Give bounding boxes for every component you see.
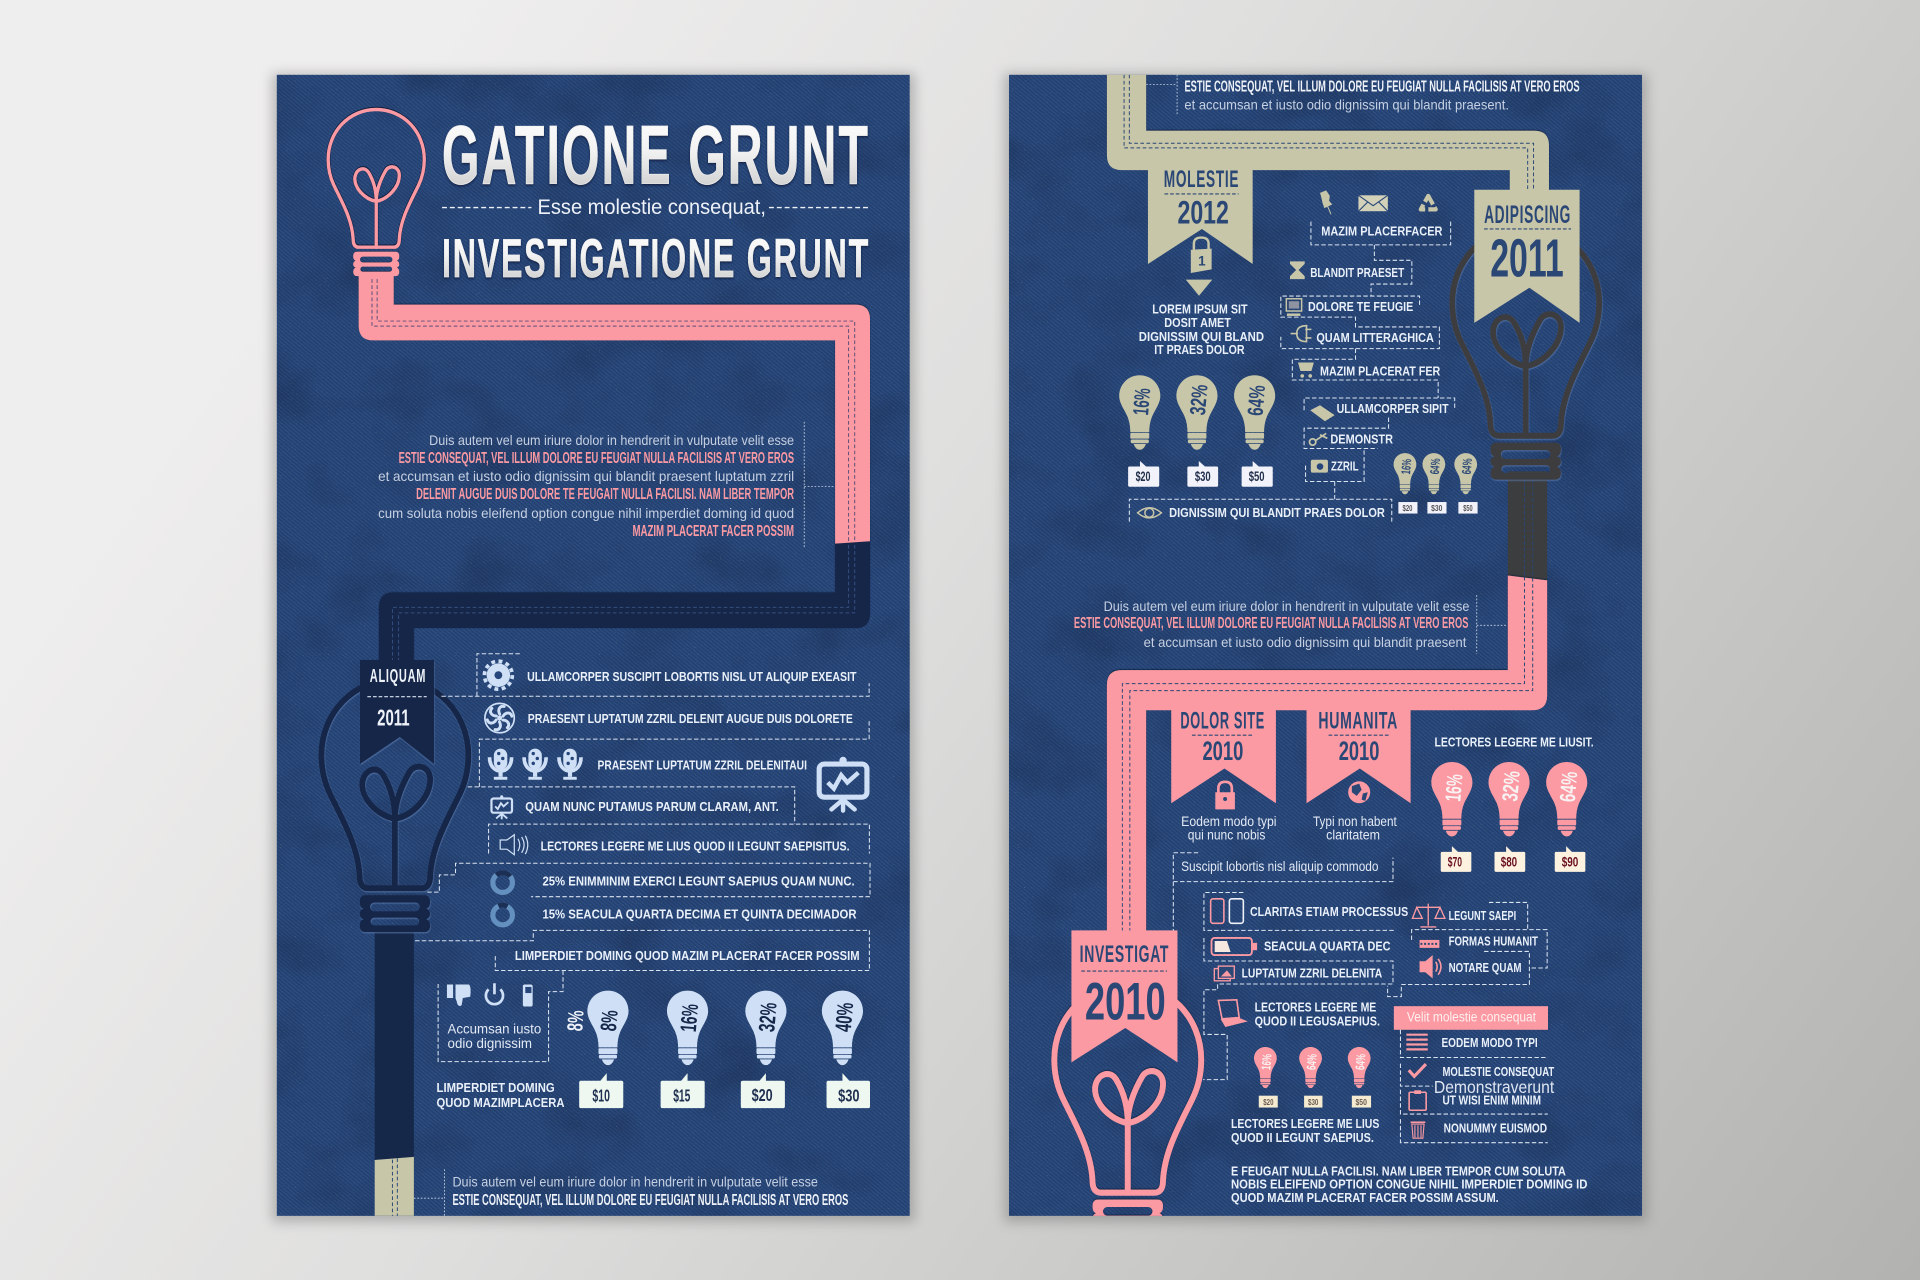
- price tag: small 20: $20: [1403, 503, 1413, 513]
- pipe: pink section: [359, 276, 870, 544]
- chart: bulb 16 percent: 16%: [675, 1003, 703, 1033]
- label: row 7: 15% SEACULA QUARTA DECIMA ET QUINTA DECIMADOR: [542, 906, 857, 921]
- icon: eye: [1138, 508, 1161, 518]
- icon: trash: [1411, 1122, 1425, 1138]
- banner: dolor site 2010: 2010: [1202, 736, 1243, 766]
- text block: footer paragraph: ESTIE CONSEQUAT, VEL ILLUM DOLORE EU FEUGIAT NULLA FACILISIS AT VERO EROS: [452, 1192, 848, 1209]
- banner: adipiscing 2011: ADIPISCING: [1484, 201, 1571, 229]
- icon: check: [1409, 1064, 1426, 1076]
- price tag: small 50: [1458, 502, 1478, 514]
- chart: pink bulb 16 percent: 16%: [1440, 773, 1468, 802]
- label: mazim placerfacer: MAZIM PLACERFACER: [1321, 223, 1443, 238]
- label: row 2: PRAESENT LUPTATUM ZZRIL DELENIT AUGUE DUIS DOLORETE: [528, 711, 853, 726]
- price tag: 70: $70: [1448, 854, 1462, 869]
- label: row 8: LIMPERDIET DOMING QUOD MAZIM PLACERAT FACER POSSIM: [515, 948, 860, 963]
- icon: fan: [485, 703, 514, 733]
- text block: limperdiet: QUOD MAZIMPLACERA: [437, 1095, 565, 1110]
- price tag: 30: [827, 1073, 870, 1108]
- price tag: small 30: [1427, 502, 1446, 514]
- chart: bulb 8 percent: 8%: [595, 1009, 623, 1032]
- chart: small pink bulb 64 percent second: 64%: [1352, 1053, 1368, 1070]
- panel: right poster: [1009, 67, 1642, 1237]
- text block: top text: et accumsan et iusto odio dignissim qui blandit praesent.: [1184, 96, 1509, 112]
- list header: velit molestie: Velit molestie consequat: [1407, 1009, 1536, 1024]
- panel: left poster: [277, 75, 910, 1216]
- text block: intro paragraph: ESTIE CONSEQUAT, VEL ILLUM DOLORE EU FEUGIAT NULLA FACILISIS AT VERO EROS: [399, 450, 794, 467]
- banner: dolor site 2010: DOLOR SITE: [1180, 708, 1265, 735]
- icon: pin: [1320, 190, 1332, 214]
- icon: hourglass: [1290, 261, 1305, 279]
- icon: padlock pink: [1215, 782, 1235, 809]
- text block: limperdiet: [437, 1080, 565, 1110]
- banner: aliquam 2011: ALIQUAM: [370, 665, 426, 686]
- label: row 1: ULLAMCORPER SUSCIPIT LOBORTIS NISL UT ALIQUIP EXEASIT: [527, 669, 857, 684]
- banner: humanita 2010: [1307, 708, 1411, 803]
- icon: phones: [1211, 899, 1243, 923]
- chart: pink bulb 16 percent: [1431, 762, 1472, 836]
- banner: humanita 2010: HUMANITA: [1318, 708, 1398, 735]
- price tag: small 50: $50: [1463, 503, 1473, 513]
- text block: lectores lius: [1231, 1116, 1380, 1145]
- banner: investigat 2010: INVESTIGAT: [1080, 941, 1169, 968]
- price tag: 80: [1494, 846, 1525, 872]
- icon: gear: [484, 661, 512, 689]
- banner: investigat 2010: 2010: [1085, 973, 1166, 1032]
- label: legunt saepi: LEGUNT SAEPI: [1449, 908, 1516, 923]
- price tag: small pink 20: $20: [1263, 1097, 1274, 1107]
- text block: typi non habent: [1313, 814, 1397, 843]
- label: row 5: LECTORES LEGERE ME LIUS QUOD II LEGUNT SAEPISITUS.: [541, 838, 850, 853]
- icon: globe: [1348, 781, 1370, 803]
- price tag: 10: [579, 1073, 623, 1108]
- chart: bulb 8 percent: [587, 991, 629, 1065]
- text block: typi non habent: claritatem: [1326, 828, 1380, 843]
- text block: limperdiet: LIMPERDIET DOMING: [437, 1080, 555, 1095]
- icon: padlock khaki: [1191, 238, 1212, 273]
- label: claritas: CLARITAS ETIAM PROCESSUS: [1250, 904, 1408, 919]
- chart: bulb 16 percent: [667, 991, 708, 1065]
- price tag: small 20: [1398, 502, 1417, 514]
- chart: small khaki bulb 16 percent: [1394, 453, 1416, 494]
- text block: lorem ipsum: LOREM IPSUM SIT: [1152, 301, 1248, 316]
- text block: accumsan: [448, 1021, 541, 1051]
- text block: lectores quod: QUOD II LEGUSAEPIUS.: [1255, 1013, 1380, 1028]
- chart: khaki bulb 32 percent: [1176, 375, 1218, 450]
- label: quam litteraghica: QUAM LITTERAGHICA: [1316, 330, 1434, 345]
- price tag: 30: $30: [1195, 469, 1211, 484]
- price tag: 20: $20: [1136, 469, 1151, 484]
- label: seacula: SEACULA QUARTA DEC: [1264, 939, 1391, 954]
- text block: lectores quod: LECTORES LEGERE ME: [1255, 999, 1377, 1014]
- icon: ring 25 percent: [489, 869, 516, 896]
- text block: footer paragraph: [452, 1174, 848, 1209]
- label: formas humanit: FORMAS HUMANIT: [1449, 933, 1538, 948]
- text block: middle paragraph: Duis autem vel eum iriure dolor in hendrerit in vulputate velit esse: [1104, 598, 1470, 614]
- banner: molestie 2012: 2012: [1177, 195, 1229, 231]
- subtitle: Esse molestie consequat,: [538, 195, 766, 219]
- chart: small khaki bulb 64 percent second: 64%: [1459, 457, 1475, 475]
- price tag: 20: $20: [752, 1085, 773, 1105]
- pipe: pink section: [1107, 576, 1547, 937]
- text block: closing paragraph: E FEUGAIT NULLA FACILISI. NAM LIBER TEMPOR CUM SOLUTA: [1231, 1163, 1566, 1178]
- chart: pink bulb 64 percent: [1546, 762, 1587, 836]
- price tag: small pink 30: $30: [1308, 1097, 1319, 1107]
- text block: typi non habent: Typi non habent: [1313, 814, 1397, 829]
- text block: middle paragraph: [1074, 598, 1470, 650]
- icon: plug: [1291, 326, 1311, 342]
- label: demonstr: DEMONSTR: [1330, 432, 1394, 447]
- chart: small pink bulb 64 percent: 64%: [1303, 1053, 1320, 1070]
- label: rotated 8 percent: 8%: [562, 1009, 589, 1032]
- label: demonstraverunt: Demonstraverunt: [1434, 1077, 1554, 1097]
- stem: navy below bulb: [375, 931, 414, 1160]
- icon: small presentation board: [491, 795, 512, 818]
- label: notare quam: NOTARE QUAM: [1449, 960, 1522, 975]
- icon: pink title bulb: [328, 109, 424, 276]
- text block: top text: [1184, 78, 1580, 112]
- icon: navy bulb: [321, 680, 468, 932]
- chart: khaki bulb 32 percent: 32%: [1185, 383, 1213, 416]
- price tag: small pink 50: $50: [1356, 1097, 1367, 1107]
- text block: lectores lius: QUOD II LEGUNT SAEPIUS.: [1231, 1130, 1374, 1145]
- banner: aliquam 2011: [360, 660, 434, 764]
- chart: small pink bulb 16 percent: [1254, 1047, 1277, 1088]
- icon: monitor: [1286, 299, 1302, 316]
- banner: molestie 2012: [1148, 166, 1253, 264]
- icon: recycle: [1421, 196, 1436, 209]
- label: molestie consequat: MOLESTIE CONSEQUAT: [1442, 1064, 1554, 1079]
- label: row 4: QUAM NUNC PUTAMUS PARUM CLARAM, ANT.: [525, 799, 779, 814]
- icon: phone: [523, 984, 533, 1007]
- banner: dolor site 2010: [1171, 708, 1276, 803]
- label: nonummy: NONUMMY EUISMOD: [1444, 1121, 1547, 1136]
- chart: small khaki bulb 64 percent: [1422, 453, 1445, 494]
- price tag: 80: $80: [1501, 854, 1517, 869]
- label: dignissim: DIGNISSIM QUI BLANDIT PRAES DOLOR: [1169, 505, 1385, 520]
- icon: ring 15 percent: [490, 902, 516, 928]
- banner: investigat 2010: [1071, 930, 1177, 1062]
- text block: eodem modo: [1181, 814, 1277, 843]
- icon: calculator: [1310, 405, 1335, 421]
- price tag: 30: $30: [838, 1085, 860, 1105]
- price tag: 90: [1555, 846, 1585, 872]
- price tag: 15: $15: [673, 1085, 690, 1105]
- text block: accumsan: Accumsan iusto: [448, 1021, 541, 1036]
- text block: top text: ESTIE CONSEQUAT, VEL ILLUM DOLORE EU FEUGIAT NULLA FACILISIS AT VERO EROS: [1184, 78, 1580, 95]
- chart: bulb 32 percent: [745, 991, 786, 1065]
- list header: velit molestie: [1394, 1006, 1548, 1030]
- chart: pink bulb 32 percent: [1488, 762, 1530, 836]
- icon: cart: [1298, 362, 1314, 378]
- banner: molestie 2012: MOLESTIE: [1164, 166, 1239, 193]
- text block: footer paragraph: Duis autem vel eum iriure dolor in hendrerit in vulputate velit esse: [452, 1174, 818, 1190]
- text block: intro paragraph: [378, 432, 794, 540]
- banner: aliquam 2011: 2011: [377, 705, 410, 731]
- text block: lorem ipsum: DOSIT AMET: [1164, 315, 1231, 330]
- text block: lorem ipsum: IT PRAES DOLOR: [1154, 342, 1245, 357]
- label: suscipit: Suscipit lobortis nisl aliquip commodo: [1181, 859, 1379, 874]
- price tag: small pink 50: [1352, 1096, 1371, 1108]
- icon: power: [486, 983, 503, 1004]
- price tag: 90: $90: [1562, 854, 1578, 869]
- icon: envelope: [1358, 195, 1388, 211]
- text block: lorem ipsum: [1139, 301, 1264, 357]
- text block: accumsan: odio dignissim: [448, 1036, 532, 1051]
- icon: pink bottom bulb: [1054, 984, 1201, 1237]
- icon: thumbs down: [447, 984, 471, 1006]
- icon: images: [1214, 966, 1234, 981]
- chart: small pink bulb 16 percent: 16%: [1258, 1053, 1275, 1070]
- icon: camera: [1311, 460, 1328, 473]
- icon: film strip: [1420, 940, 1439, 948]
- text block: lorem ipsum: DIGNISSIM QUI BLAND: [1139, 329, 1264, 344]
- text block: closing paragraph: [1231, 1163, 1587, 1205]
- price tag: 20: [741, 1073, 785, 1108]
- price tag: 15: [661, 1073, 705, 1108]
- title: main heading: GATIONE GRUNT: [442, 109, 870, 202]
- text block: middle paragraph: et accumsan et iusto odio dignissim qui blandit praesent: [1144, 634, 1466, 650]
- label: luptatum: LUPTATUM ZZRIL DELENITA: [1242, 966, 1383, 981]
- chart: small pink bulb 64 percent: [1299, 1047, 1322, 1088]
- price tag: 20: [1128, 461, 1159, 487]
- price tag: small 30: $30: [1431, 503, 1443, 513]
- stem: khaki end: [375, 1157, 414, 1216]
- chart: khaki bulb 64 percent: [1234, 375, 1275, 450]
- pipe: khaki section: [1107, 67, 1549, 196]
- text block: intro paragraph: MAZIM PLACERAT FACER POSSIM: [632, 523, 794, 540]
- chart: small khaki bulb 64 percent: 64%: [1427, 457, 1443, 475]
- icon: clipboard: [1409, 1090, 1426, 1110]
- label: eodem modo typi: EODEM MODO TYPI: [1441, 1035, 1538, 1050]
- icon: list lines: [1406, 1035, 1428, 1049]
- label: dolore te feugie: DOLORE TE FEUGIE: [1308, 299, 1414, 314]
- text block: lectores quod: [1255, 999, 1380, 1028]
- text block: eodem modo: qui nunc nobis: [1188, 828, 1266, 843]
- text block: closing paragraph: NOBIS ELEIFEND OPTION CONGUE NIHIL IMPERDIET DOMING ID: [1231, 1177, 1587, 1192]
- icons: microphones: [490, 749, 581, 778]
- icon: presentation board: [819, 757, 867, 811]
- chart: small khaki bulb 16 percent: 16%: [1398, 458, 1414, 475]
- title: second heading: INVESTIGATIONE GRUNT: [442, 227, 870, 289]
- icon: padlock khaki: 1: [1198, 254, 1206, 269]
- label: row 3: PRAESENT LUPTATUM ZZRIL DELENITAUI: [598, 758, 807, 773]
- price tag: 50: $50: [1249, 469, 1265, 484]
- banner: adipiscing 2011: [1474, 190, 1580, 323]
- chart: small khaki bulb 64 percent second: [1454, 453, 1477, 494]
- label: ut wisi: UT WISI ENIM MINIM: [1442, 1092, 1541, 1107]
- banner: adipiscing 2011: 2011: [1490, 228, 1564, 288]
- chart: khaki bulb 16 percent: [1119, 375, 1160, 450]
- label: lectores liusit: LECTORES LEGERE ME LIUSIT.: [1434, 735, 1594, 750]
- chart: pink bulb 32 percent: 32%: [1497, 770, 1525, 802]
- label: row 6: 25% ENIMMINIM EXERCI LEGUNT SAEPIUS QUAM NUNC.: [542, 873, 855, 888]
- label: mazim placerat fer: MAZIM PLACERAT FER: [1320, 363, 1441, 378]
- icon: dark bulb: [1452, 227, 1599, 480]
- arrow: down triangle: [1186, 280, 1212, 296]
- chart: khaki bulb 64 percent: 64%: [1243, 384, 1270, 417]
- price tag: 70: [1441, 846, 1471, 872]
- chart: bulb 32 percent: 32%: [753, 1001, 782, 1033]
- chart: bulb 40 percent: 40%: [830, 1001, 858, 1033]
- text block: intro paragraph: DELENIT AUGUE DUIS DOLORE TE FEUGAIT NULLA FACILISI. NAM LIBER TEMPOR: [416, 486, 794, 503]
- text block: lectores lius: LECTORES LEGERE ME LIUS: [1231, 1116, 1380, 1131]
- chart: pink bulb 64 percent: 64%: [1555, 770, 1582, 803]
- stem: dark section: [1508, 471, 1547, 580]
- icon: laptop: [1218, 1000, 1245, 1026]
- text block: intro paragraph: Duis autem vel eum iriure dolor in hendrerit in vulputate velit esse: [429, 432, 794, 448]
- price tag: 30: [1187, 461, 1218, 487]
- chart: small pink bulb 64 percent second: [1348, 1047, 1371, 1088]
- label: blandit praeset: BLANDIT PRAESET: [1310, 265, 1404, 280]
- banner: humanita 2010: 2010: [1339, 736, 1379, 766]
- chart: khaki bulb 16 percent: 16%: [1128, 387, 1155, 416]
- text block: middle paragraph: ESTIE CONSEQUAT, VEL ILLUM DOLORE EU FEUGIAT NULLA FACILISIS AT VERO EROS: [1074, 615, 1468, 632]
- icon: bike: [1309, 433, 1327, 445]
- icon: scales: [1412, 904, 1445, 927]
- text block: intro paragraph: cum soluta nobis eleifend option congue nihil imperdiet doming id quod: [378, 505, 794, 521]
- price tag: small pink 30: [1304, 1096, 1322, 1108]
- label: ullamcorper sipit: ULLAMCORPER SIPIT: [1337, 401, 1449, 416]
- label: zzril: ZZRIL: [1331, 459, 1359, 474]
- price tag: small pink 20: [1259, 1096, 1278, 1108]
- icon: pink speaker: [1420, 955, 1441, 978]
- price tag: 50: [1242, 461, 1273, 487]
- icon: speaker: [500, 835, 528, 855]
- price tag: 10: $10: [592, 1085, 610, 1105]
- text block: eodem modo: Eodem modo typi: [1181, 814, 1277, 829]
- text block: intro paragraph: et accumsan et iusto odio dignissim qui blandit praesent luptatum zzril: [378, 468, 794, 484]
- text block: closing paragraph: QUOD MAZIM PLACERAT FACER POSSIM ASSUM.: [1231, 1190, 1499, 1205]
- pipe: navy section: [379, 539, 870, 667]
- icon: battery: [1212, 938, 1257, 955]
- chart: bulb 40 percent: [822, 991, 863, 1065]
